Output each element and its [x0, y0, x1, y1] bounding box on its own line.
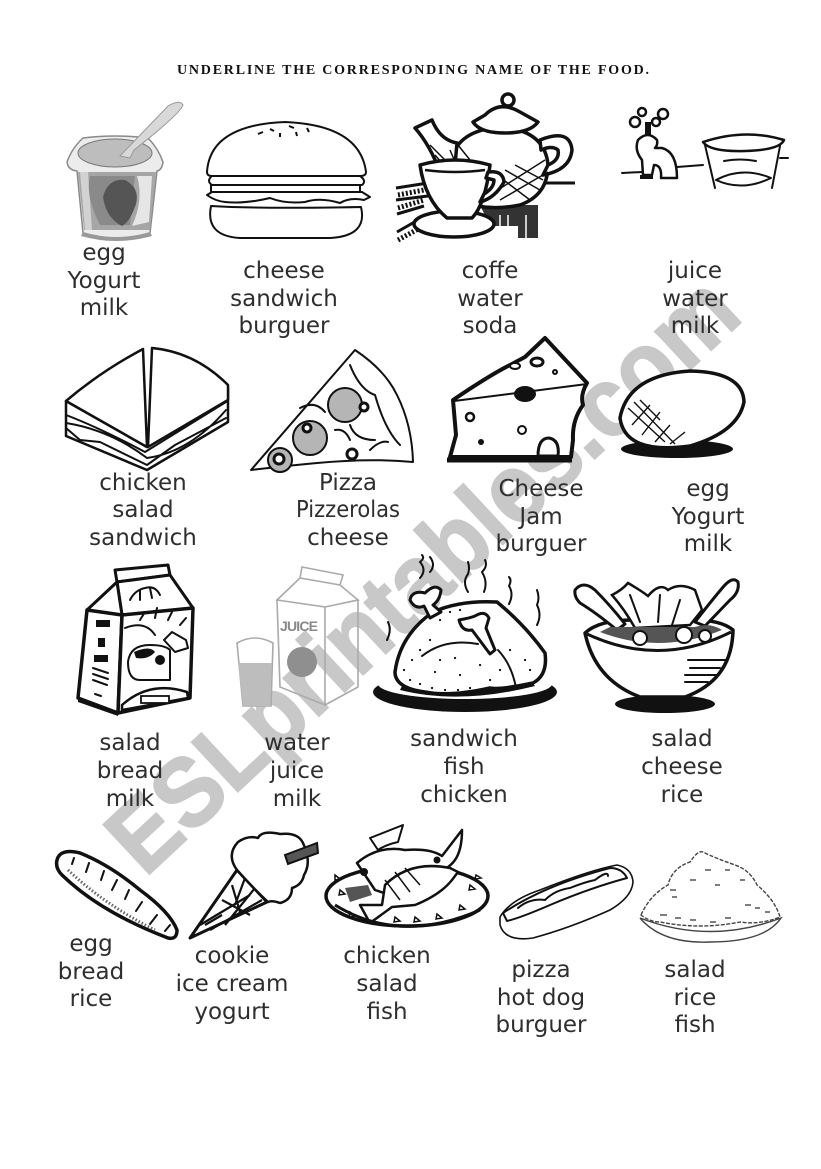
options: hot dog: burguer: [495, 1012, 587, 1038]
options: ice cream: cookie: [195, 943, 269, 969]
icon: pizza: [251, 350, 413, 472]
options: pizza: [296, 470, 400, 551]
icon: cheese: [447, 338, 587, 460]
options: fish: salad: [356, 971, 418, 997]
options: ice cream: [176, 943, 288, 1025]
options: yogurt: [67, 240, 140, 321]
options: milk carton: milk: [106, 786, 155, 812]
title: UNDERLINE THE CORRESPONDING NAME OF THE FOOD.: [177, 63, 649, 78]
options: fish: chicken: [343, 943, 431, 969]
icon: egg: [620, 371, 744, 458]
icon: juice carton and glass: JUICE: [280, 618, 318, 634]
options: pizza: cheese: [307, 525, 389, 551]
icon: plate of fish: [326, 825, 488, 926]
options: pizza: Pizzerolas: [296, 497, 400, 523]
watermark: ESLprintables.com: [84, 254, 759, 893]
icon: ice cream: [190, 833, 318, 938]
options: juice: [264, 730, 330, 812]
options: rice: rice: [674, 985, 716, 1011]
options: coffee: water: [457, 286, 523, 312]
options: rice: [664, 957, 726, 1038]
icon: bread: [57, 852, 177, 938]
icon: hot dog: [500, 865, 633, 939]
icon: milk carton with cow: [78, 565, 193, 716]
options: hot dog: pizza: [511, 957, 571, 983]
options: burger: sandwich: [230, 286, 338, 312]
options: salad: salad: [651, 726, 713, 752]
options: rice: salad: [664, 957, 726, 983]
options: ice cream: ice cream: [176, 971, 288, 997]
options: bread: [58, 931, 124, 1012]
options: pizza: Pizza: [319, 470, 377, 496]
options: chicken: [410, 726, 518, 808]
options: cheese: Cheese: [498, 476, 584, 502]
options: bread: bread: [58, 959, 124, 985]
icon: yogurt: [67, 102, 183, 241]
options: egg: [671, 476, 744, 557]
options: sandwich: salad: [112, 497, 174, 523]
icon: salad bowl: [575, 580, 738, 713]
options: yogurt: Yogurt: [67, 268, 140, 294]
options: burger: cheese: [243, 258, 325, 284]
icon: juice carton and glass: [237, 567, 358, 706]
icon: sandwich: [66, 348, 228, 470]
options: cheese: Jam: [517, 504, 563, 530]
options: ice cream: yogurt: [194, 999, 270, 1025]
options: hot dog: [495, 957, 587, 1038]
options: milk carton: salad: [99, 730, 161, 756]
options: salad: [641, 726, 723, 808]
options: water: milk: [671, 313, 720, 339]
options: egg: Yogurt: [671, 504, 744, 530]
icon: teapot and cup: [396, 94, 575, 240]
options: fish: fish: [366, 999, 408, 1025]
options: burger: [230, 258, 338, 339]
icon: tap and glass of water: [622, 108, 788, 188]
options: bread: egg: [69, 931, 113, 957]
options: cheese: [495, 476, 587, 557]
options: milk carton: [97, 730, 163, 812]
options: bread: rice: [70, 986, 112, 1012]
options: juice: juice: [269, 758, 324, 784]
options: water: juice: [667, 258, 722, 284]
icon: roast chicken: [373, 555, 557, 712]
options: coffee: [457, 258, 523, 339]
options: chicken: sandwich: [410, 726, 518, 752]
options: cheese: burguer: [495, 531, 587, 557]
options: milk carton: bread: [97, 758, 163, 784]
options: juice: water: [264, 730, 330, 756]
options: yogurt: egg: [82, 240, 126, 266]
options: chicken: fish: [443, 754, 485, 780]
options: chicken: chicken: [420, 782, 508, 808]
options: water: water: [662, 286, 728, 312]
options: water: [662, 258, 728, 339]
options: juice: milk: [273, 786, 322, 812]
options: salad: rice: [661, 782, 703, 808]
options: fish: [343, 943, 431, 1025]
options: rice: fish: [674, 1012, 716, 1038]
options: egg: milk: [684, 531, 733, 557]
options: sandwich: [89, 470, 197, 551]
options: salad: cheese: [641, 754, 723, 780]
options: coffee: soda: [463, 313, 517, 339]
options: yogurt: milk: [80, 295, 129, 321]
options: hot dog: hot dog: [497, 985, 585, 1011]
icon: burger: [207, 122, 370, 238]
options: sandwich: chicken: [99, 470, 187, 496]
options: coffee: coffe: [462, 258, 518, 284]
options: burger: burguer: [238, 313, 330, 339]
options: sandwich: sandwich: [89, 525, 197, 551]
icon: rice: [640, 852, 781, 942]
options: egg: egg: [686, 476, 730, 502]
